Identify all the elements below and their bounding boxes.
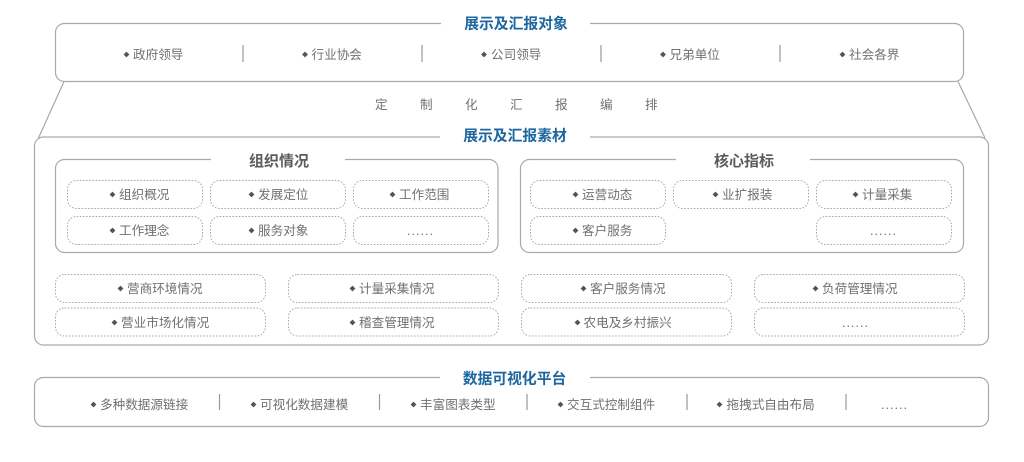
chip: development positioning: 发展定位 <box>258 187 309 202</box>
chip: organization overview: 组织概况 <box>119 188 170 202</box>
chip: development positioning <box>210 180 346 208</box>
item: rich chart types: 丰富图表类型 <box>420 397 496 412</box>
chip: load management: 负荷管理情况 <box>822 282 898 296</box>
chip: operations: 运营动态 <box>582 188 633 202</box>
heading: data visualization platform: 数据可视化平台 <box>463 370 566 388</box>
heading: report audience: 展示及汇报对象 <box>464 14 568 32</box>
chip: business expansion <box>674 180 808 208</box>
chip: organization overview <box>68 180 202 208</box>
text: customized report compilation: 排 <box>645 98 658 112</box>
chip: more: ...... <box>842 316 869 330</box>
chip: audit management: 稽查管理情况 <box>359 316 435 330</box>
text: customized report compilation: 定 <box>375 98 388 112</box>
chip: service targets <box>210 216 346 244</box>
item: industry associations: 行业协会 <box>312 48 362 62</box>
chip: customer service status <box>522 274 732 302</box>
chip: marketization <box>56 308 266 336</box>
item: government leaders: 政府领导 <box>133 48 183 62</box>
chip: load management <box>754 274 964 302</box>
chip: customer service: 客户服务 <box>582 223 633 238</box>
heading: report materials: 展示及汇报素材 <box>463 126 567 144</box>
item: interactive controls: 交互式控制组件 <box>567 397 655 412</box>
text: customized report compilation: 汇 <box>510 98 523 112</box>
chip: metering collection <box>816 180 952 208</box>
connector: funnel lines <box>38 82 985 138</box>
heading: organization: 组织情况 <box>249 152 309 170</box>
chip: customer service <box>530 216 666 244</box>
item: all sectors of society: 社会各界 <box>849 47 900 62</box>
chip: customer service status: 客户服务情况 <box>590 281 666 296</box>
chip: rural electrification: 农电及乡村振兴 <box>584 316 672 330</box>
text: customized report compilation: 制 <box>420 98 433 112</box>
chip: more <box>754 308 964 336</box>
chip: more: ...... <box>870 224 897 238</box>
chip: metering collection status <box>288 274 498 302</box>
item: sibling units: 兄弟单位 <box>670 48 720 62</box>
text: customized report compilation: 化 <box>465 98 478 112</box>
chip: more <box>354 216 488 244</box>
panel: organization <box>56 152 498 252</box>
chip: metering collection: 计量采集 <box>862 187 913 202</box>
chip: scope of work <box>354 180 488 208</box>
panel: report materials <box>34 126 988 345</box>
text: customized report compilation: 报 <box>555 98 568 112</box>
chip: business environment: 营商环境情况 <box>127 282 203 296</box>
chip: service targets: 服务对象 <box>258 223 308 238</box>
item: multiple data source links: 多种数据源链接 <box>100 397 189 412</box>
chip: scope of work: 工作范围 <box>399 188 449 202</box>
chip: work philosophy <box>68 216 202 244</box>
text: customized report compilation: 编 <box>600 98 613 112</box>
chip: audit management <box>288 308 498 336</box>
chip: work philosophy: 工作理念 <box>119 223 170 238</box>
item: drag and drop layout: 拖拽式自由布局 <box>726 398 815 412</box>
chip: operations <box>530 180 666 208</box>
text: customized report compilation <box>375 98 658 112</box>
panel: data visualization platform <box>34 370 988 426</box>
chip: rural electrification <box>522 308 732 336</box>
item: visual data modeling: 可视化数据建模 <box>260 397 349 412</box>
panel: report audience <box>56 14 964 82</box>
item: more: ...... <box>881 398 908 412</box>
chip: business environment <box>56 274 266 302</box>
chip: more: ...... <box>407 224 434 238</box>
chip: metering collection status: 计量采集情况 <box>359 281 435 296</box>
chip: business expansion: 业扩报装 <box>722 188 773 202</box>
chip: marketization: 营业市场化情况 <box>121 315 210 330</box>
panel: core indicators <box>520 152 964 252</box>
item: company leaders: 公司领导 <box>491 48 541 62</box>
chip: more <box>816 216 952 244</box>
heading: core indicators: 核心指标 <box>714 152 774 170</box>
